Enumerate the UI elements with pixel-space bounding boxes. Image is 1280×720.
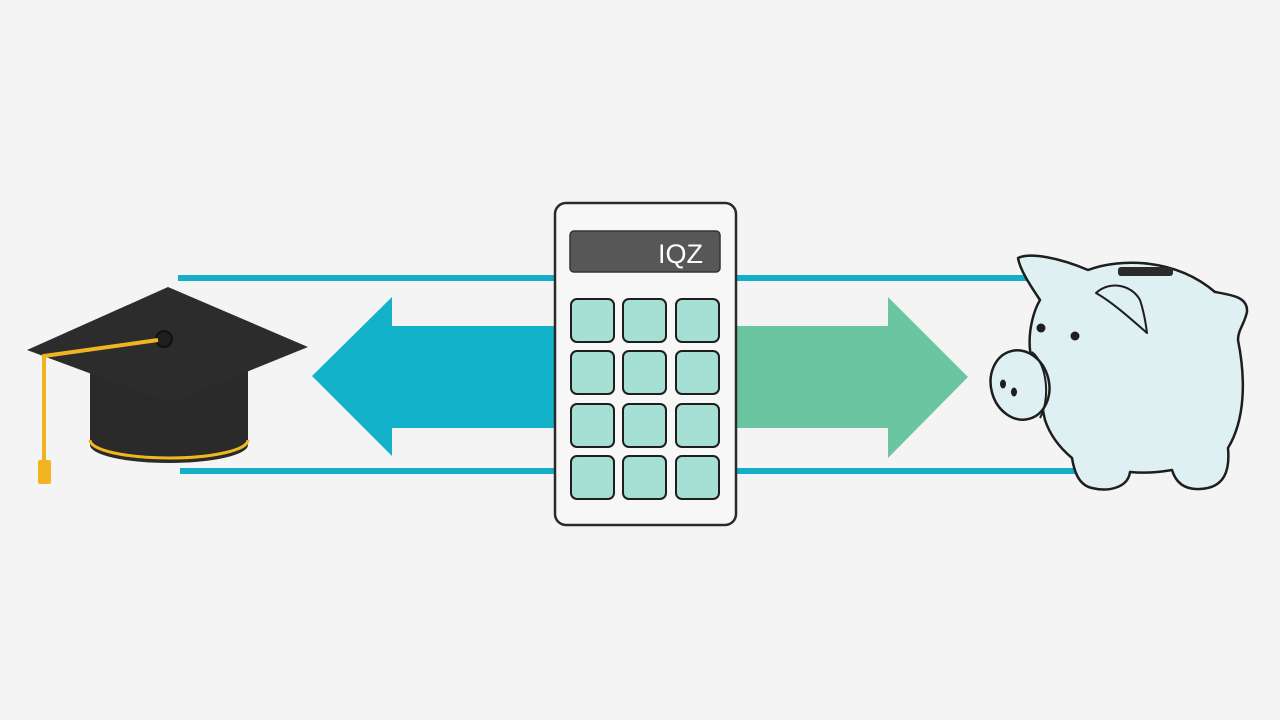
icon: calculator (555, 203, 736, 525)
calculator keys (571, 299, 719, 499)
arrow: left (teal) (312, 297, 556, 456)
calculator display: IQZ (658, 239, 703, 269)
icon: graduation cap (27, 287, 308, 484)
icon: piggy bank (983, 256, 1247, 489)
calculator display (570, 231, 720, 272)
connector lines (178, 275, 1075, 474)
arrow: right (green) (736, 297, 968, 458)
